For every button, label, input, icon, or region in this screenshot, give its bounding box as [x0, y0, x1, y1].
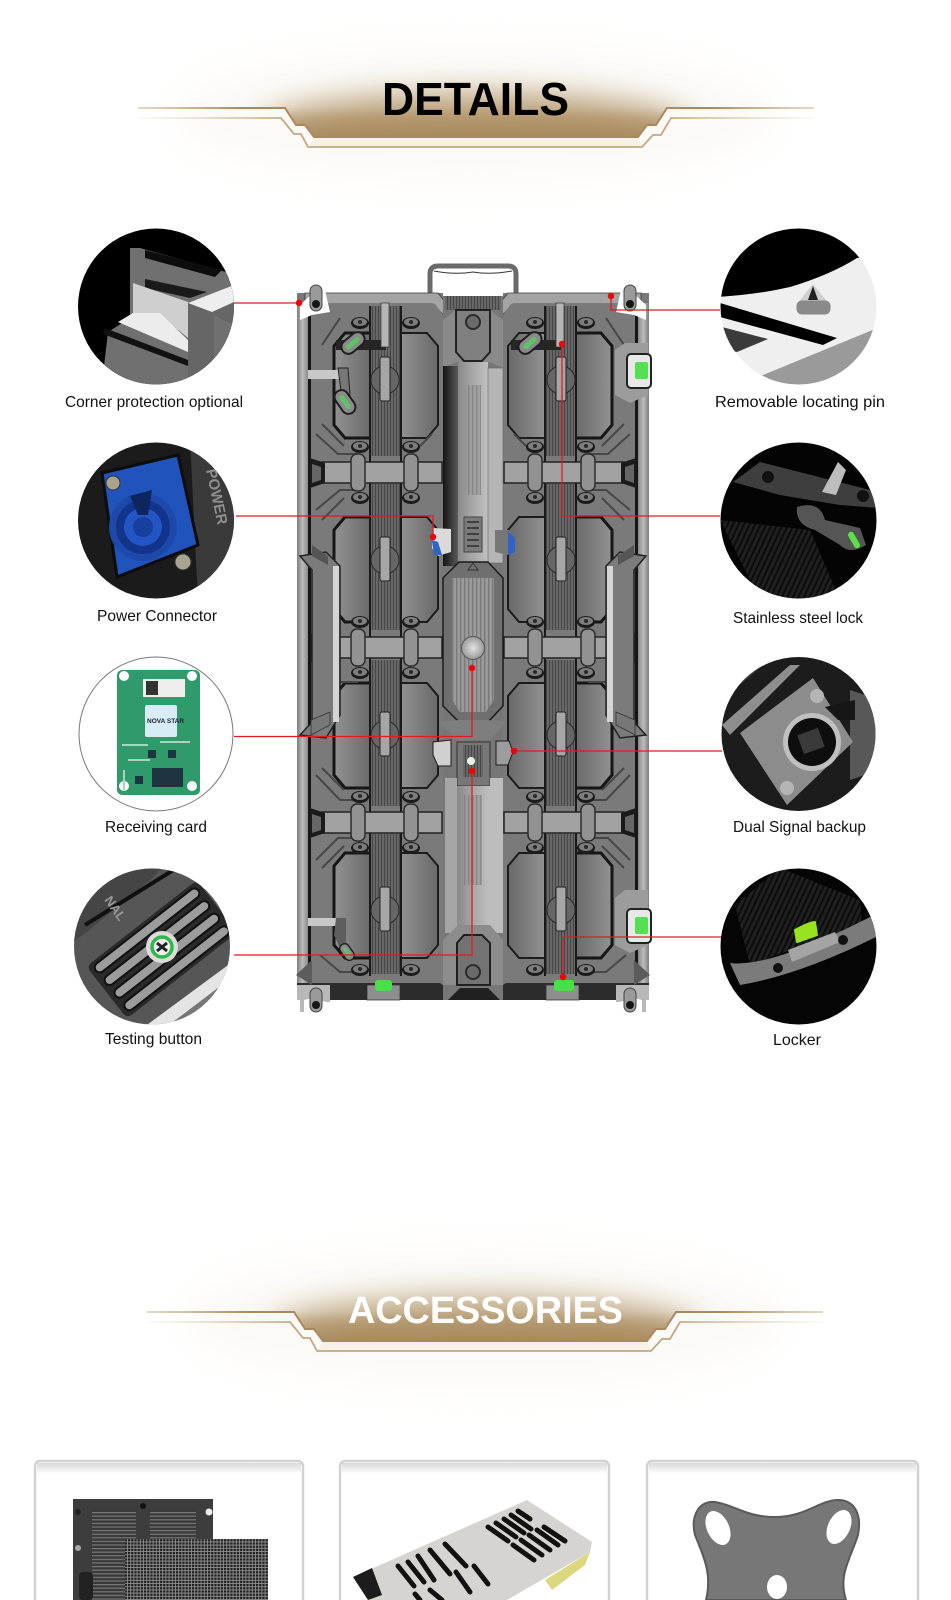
icon: testing button photo	[74, 868, 230, 1024]
callout: locating pin	[608, 293, 720, 310]
blue power plug left	[432, 528, 451, 556]
label: locker: Locker	[773, 1032, 822, 1049]
icon: receiving card photo	[79, 657, 233, 811]
label: receiving card: Receiving card	[105, 819, 207, 836]
aluminium knob	[462, 636, 484, 660]
label: locating pin: Removable locating pin	[715, 394, 885, 411]
blue power plug right	[495, 530, 515, 555]
callout lines and dots	[234, 293, 722, 980]
right half of cabinet	[481, 285, 650, 1012]
icon: power connector photo: POWER	[202, 467, 231, 526]
LED panel rear view	[296, 266, 651, 1012]
silver signal plug left	[433, 740, 451, 766]
label: power connector: Power Connector	[97, 608, 218, 625]
silver signal plug right	[496, 741, 513, 765]
card: power supply	[340, 1461, 609, 1600]
label: steel lock: Stainless steel lock	[733, 610, 864, 627]
icon: locker photo	[720, 868, 876, 1024]
carry handle	[430, 266, 516, 296]
heading: DETAILS	[138, 50, 814, 180]
icon: corner protection photo	[78, 228, 234, 384]
card: LED module	[35, 1461, 303, 1600]
icon: locating pin photo	[720, 228, 876, 384]
left half of cabinet	[296, 285, 465, 1012]
label: corner protection: Corner protection optional	[65, 394, 243, 411]
card: mounting plate	[647, 1461, 918, 1600]
label: testing button: Testing button	[105, 1031, 202, 1048]
heading: ACCESSORIES	[147, 1254, 823, 1384]
accessories cards	[35, 1461, 918, 1600]
callout: locker	[560, 937, 722, 980]
callout: receiving card	[234, 665, 475, 736]
callout: dual signal	[511, 748, 722, 754]
title text: ACCESSORIES	[348, 1290, 623, 1332]
icon: power connector photo	[78, 442, 234, 598]
callout: testing button	[234, 768, 475, 955]
title text: DETAILS	[382, 73, 569, 125]
central spine	[432, 296, 515, 1000]
icon: testing button photo: NAL	[102, 893, 129, 924]
icon: receiving card photo: NOVA STAR	[147, 718, 184, 725]
callout: power connector	[236, 516, 436, 540]
latches and green locks	[308, 303, 651, 991]
label: dual signal: Dual Signal backup	[733, 819, 866, 836]
icon: dual signal photo	[722, 657, 876, 811]
callout: steel lock	[559, 341, 720, 516]
icon: steel lock photo	[720, 442, 876, 598]
callout: corner protection	[234, 300, 302, 306]
